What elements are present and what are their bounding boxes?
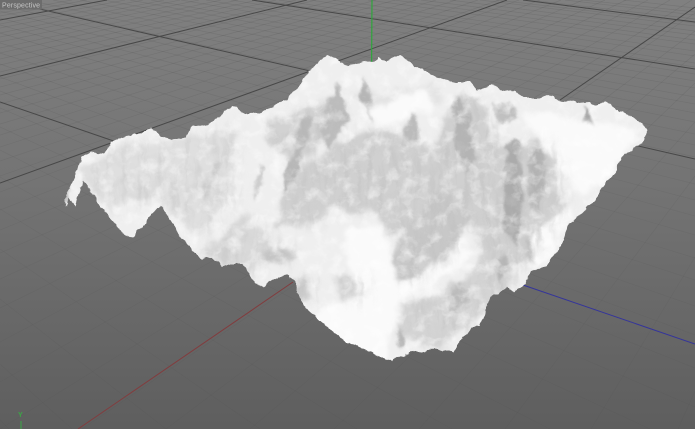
label: Perspective: [0, 0, 42, 10]
mottled white highlights: [60, 50, 655, 365]
bright glacier valley and snowfields: [312, 90, 640, 368]
axis: green Y: [370, 0, 373, 78]
dark ridge streaks: [60, 78, 594, 350]
axis gizmo: Y: [18, 412, 23, 429]
major floor grid: [0, 0, 695, 205]
mottled gray noise: [507, 178, 517, 230]
broad shading: [80, 85, 562, 350]
axis: blue Z: [523, 285, 695, 344]
axis: red X: [78, 282, 293, 429]
label: Perspective: Perspective: [2, 2, 40, 9]
axis gizmo: Y: Y: [18, 412, 23, 419]
vertical streak noise: [122, 122, 567, 334]
terrain base: [60, 50, 655, 365]
terrain mesh: [60, 50, 655, 368]
